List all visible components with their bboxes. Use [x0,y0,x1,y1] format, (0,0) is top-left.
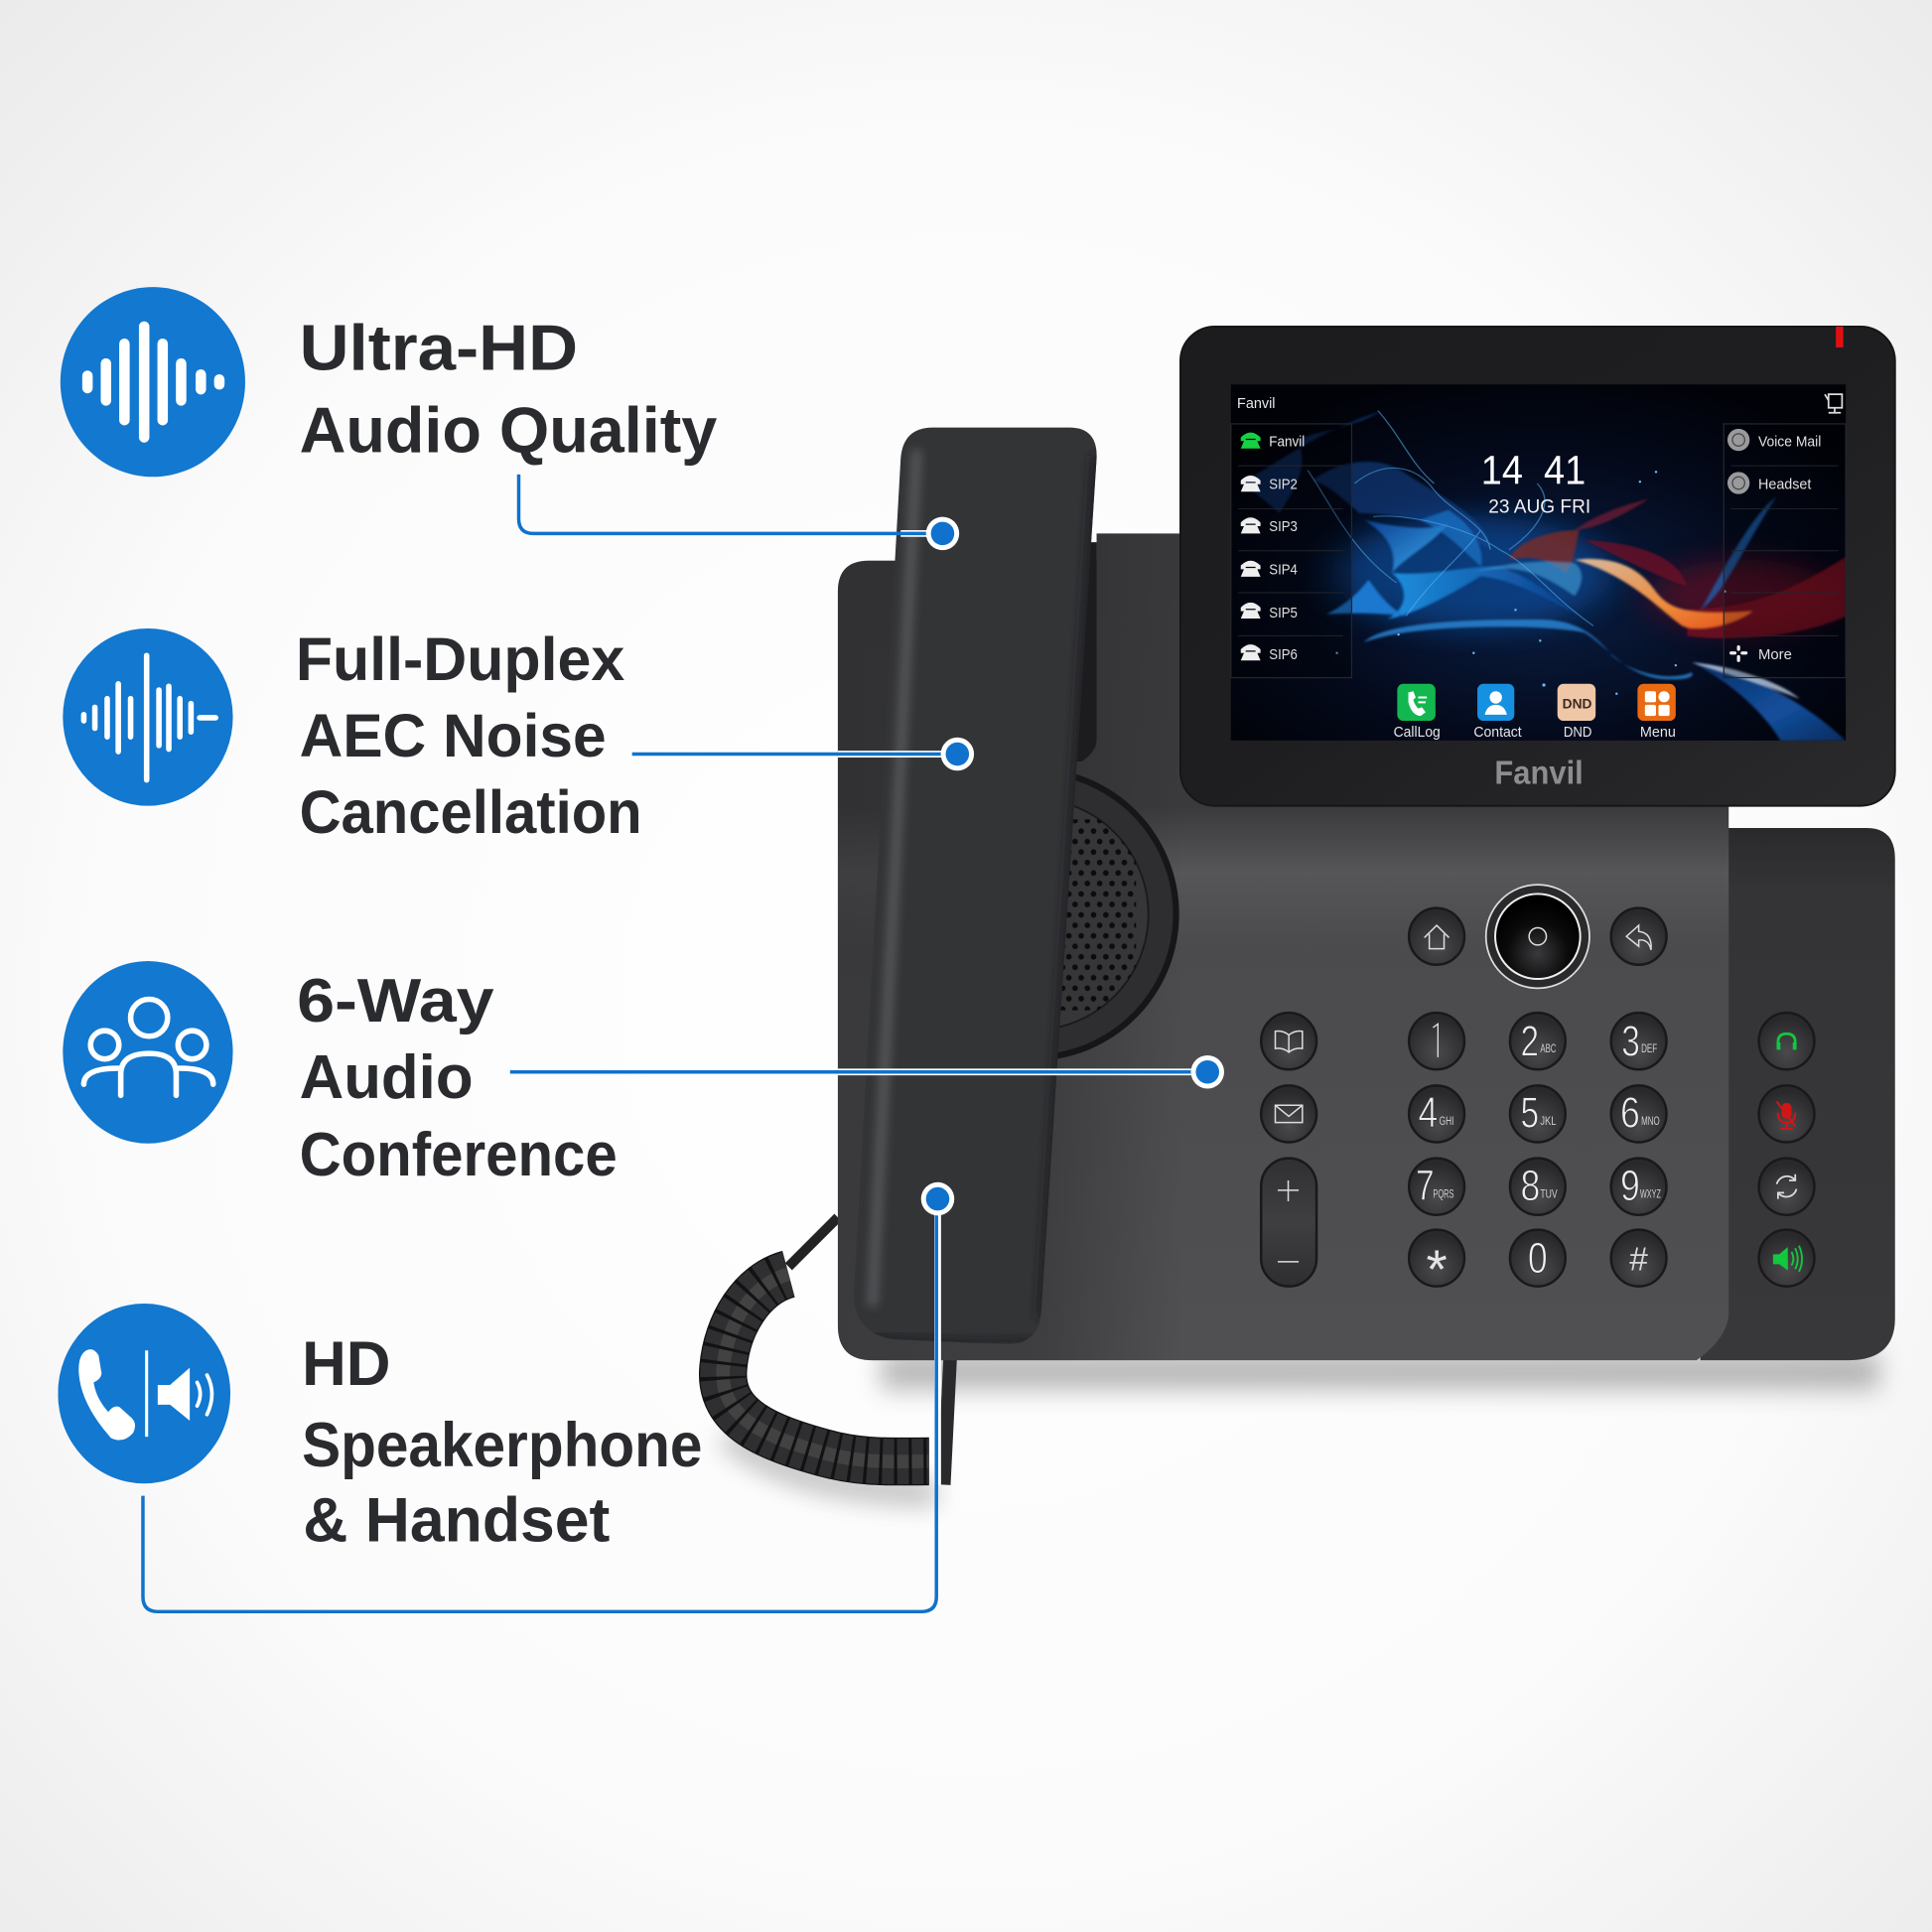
Fanvil logo: Fanvil [1494,755,1584,791]
more item: More [1758,647,1792,663]
icon: people group [63,961,233,1144]
heading [296,625,642,846]
callout: speakerphone connector [143,1182,954,1611]
main body [838,533,1728,1360]
stars [1335,471,1726,695]
heading: Speakerphone [302,1411,702,1480]
feature: Full-Duplex AEC Noise Cancellation [63,625,642,846]
volume key [1261,1159,1316,1287]
key 0 [1510,1230,1566,1287]
callout: noise cancellation connector [632,738,974,770]
key 6: 6 [1620,1090,1640,1138]
icon: noise cancelling wave [63,628,233,806]
display bezel [1180,327,1895,806]
line key: SIP5: SIP5 [1269,606,1298,621]
heading: Ultra-HD [300,312,578,383]
line key: SIP2 [1241,476,1298,493]
callout: conference connector [510,1055,1224,1088]
phone [723,327,1895,1484]
line key: SIP5 [1241,603,1298,621]
app: Contact: Contact [1473,725,1523,741]
feature: HD Speakerphone & Handset [58,1304,702,1556]
left body shade [838,533,1182,1360]
clock: 23 AUG FRI [1488,495,1590,517]
headset item: Headset [1758,478,1812,493]
voice mail item: Voice Mail [1758,434,1821,450]
transfer key [1759,1159,1814,1215]
contacts key [1261,1013,1316,1069]
more item [1731,647,1792,663]
heading [302,1329,702,1556]
feature: 6-Way Audio Conference [63,961,618,1189]
key 9: WXYZ [1640,1186,1661,1200]
icon: sound wave [61,287,245,477]
key 3: DEF [1641,1041,1658,1055]
home key [1409,908,1464,965]
key 5: JKL [1540,1114,1557,1128]
key 4: GHI [1440,1114,1453,1128]
right function panel [1724,424,1846,678]
status bar: Fanvil [1237,396,1276,412]
key 7 [1409,1159,1464,1215]
handset cradle hook [1059,542,1097,761]
heading: Audio [300,1043,474,1112]
heading: 6-Way [297,967,494,1035]
icon: handset and speaker [58,1304,230,1483]
message key [1261,1085,1316,1142]
key 6: MNO [1641,1114,1660,1128]
key 8: 8 [1520,1163,1540,1210]
heading: Conference [300,1121,618,1189]
line key: SIP6: SIP6 [1269,647,1298,663]
callout: audio quality connector [518,475,959,550]
line key: SIP4 [1241,561,1298,578]
heading: HD [302,1329,390,1399]
heading [300,312,717,466]
handset [854,428,1097,1344]
key 2: 2 [1520,1019,1539,1066]
key 5 [1510,1085,1566,1142]
phone: shadow [727,1353,1879,1493]
voice mail item [1727,429,1821,451]
key 2 [1510,1013,1566,1069]
coiled handset cord [723,1217,951,1484]
key star [1409,1230,1464,1300]
key 2: ABC [1540,1041,1556,1055]
heading: Audio Quality [300,394,717,466]
key 6 [1611,1085,1667,1142]
key 7: PQRS [1433,1186,1453,1200]
key 4: 4 [1418,1090,1438,1138]
keypad [1261,885,1814,1300]
heading: AEC Noise [300,702,607,769]
line key: Fanvil: Fanvil [1269,434,1305,450]
key 3: 3 [1621,1019,1640,1066]
line key: SIP3: SIP3 [1269,519,1298,535]
clock: 14 41 [1481,448,1586,493]
app: Menu: Menu [1640,725,1676,741]
wallpaper [1242,411,1847,742]
line key: SIP6 [1241,644,1298,663]
status LED [1836,327,1844,347]
headset item [1727,472,1812,494]
key 9: 9 [1620,1163,1640,1210]
touchscreen [1231,384,1847,742]
heading [297,967,618,1189]
key 3 [1611,1013,1667,1069]
back key [1611,908,1667,965]
key 0: 0 [1528,1235,1548,1283]
status bar [1237,394,1842,413]
app: CallLog [1394,684,1441,741]
app: DND [1558,684,1595,741]
feature: Ultra-HD Audio Quality [61,287,717,477]
heading: Cancellation [300,778,642,846]
heading: Full-Duplex [296,625,624,693]
right side panel [1701,828,1895,1360]
line key: SIP3 [1241,517,1298,535]
line key: Fanvil [1241,433,1305,450]
app: DND: DND [1563,697,1592,712]
app: Menu [1637,684,1676,741]
heading: & Handset [303,1486,610,1556]
key 8 [1510,1159,1566,1215]
key hash: # [1629,1242,1648,1279]
speaker [1057,774,1179,1058]
key 4 [1409,1085,1464,1142]
key star: * [1426,1239,1448,1300]
key 7: 7 [1416,1163,1435,1210]
speaker key [1759,1230,1814,1287]
app: DND: DND [1564,725,1592,741]
camera [1486,885,1589,988]
left line keys panel [1231,424,1351,678]
key 9 [1611,1159,1667,1215]
key 1 [1409,1013,1464,1069]
mute key [1759,1085,1814,1142]
line key: SIP2: SIP2 [1269,478,1298,493]
clock [1481,448,1590,517]
key 8: TUV [1540,1186,1558,1200]
app: Contact [1473,684,1523,741]
headset key [1759,1013,1814,1069]
key hash [1611,1230,1667,1287]
line key: SIP4: SIP4 [1269,562,1298,578]
key 5: 5 [1520,1090,1539,1138]
app: CallLog: CallLog [1394,725,1441,741]
